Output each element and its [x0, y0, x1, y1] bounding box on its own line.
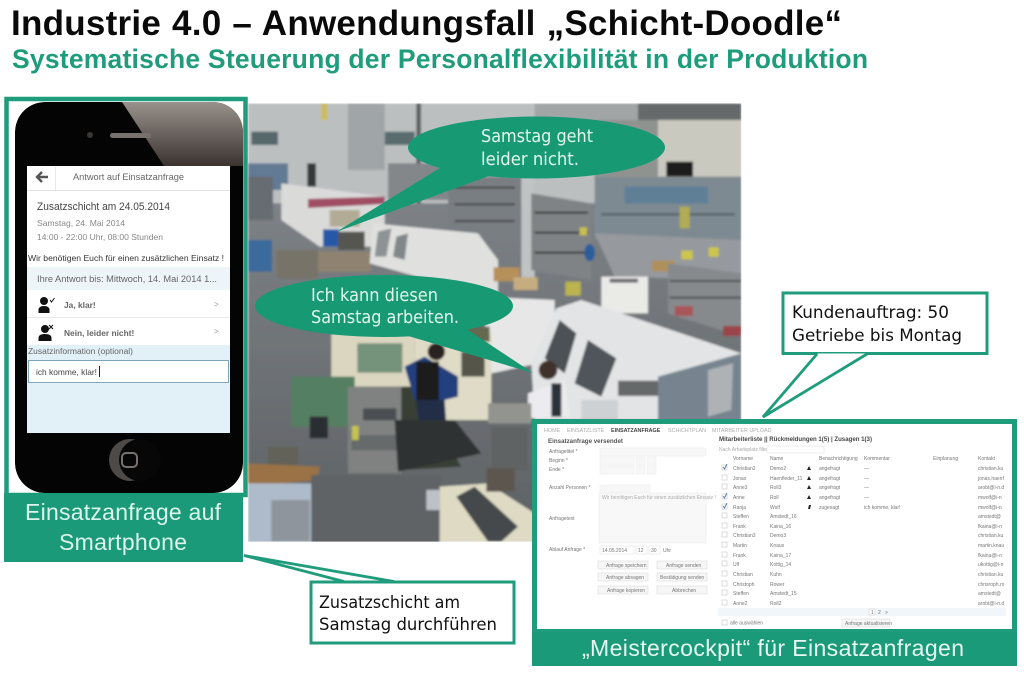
- employee table: Anne: [733, 495, 745, 501]
- phone screen: Ihre Antwort bis: Mittwoch, 14. Mai 2014 1...: [37, 274, 217, 284]
- employee table: angefragt: [819, 485, 841, 491]
- navigation tabs: HOME: [544, 428, 561, 434]
- form buttons: Abbrechen: [672, 588, 696, 594]
- speech bubble: Samstag geht leider nicht: Samstag geht: [481, 127, 593, 147]
- employee table: —: [864, 476, 869, 482]
- employee table: mwolf@i-n: [978, 495, 1002, 501]
- employee table: angefragt: [819, 476, 841, 482]
- employee table: Christian2: [733, 466, 756, 472]
- caption: Einsatzanfrage auf Smartphone: [4, 493, 243, 562]
- person status icons: [807, 466, 811, 509]
- form buttons: Anfrage senden: [666, 563, 702, 569]
- phone screen: [27, 166, 230, 433]
- employee table: Roll3: [770, 485, 782, 491]
- employee table: angefragt: [819, 466, 841, 472]
- request form: 14.05.2014: [602, 548, 627, 554]
- callout: Zusatzschicht am Samstag durchführen: Samstag durchführen: [319, 615, 497, 634]
- photo: factory floor: [248, 103, 741, 543]
- form buttons: Anfrage kopieren: [607, 588, 645, 594]
- employee table: Kuhn: [770, 572, 782, 578]
- title: Industrie 4.0 – Anwendungsfall „Schicht-Doodle“: [11, 4, 842, 43]
- employee table: 1: [871, 610, 874, 616]
- phone screen: 14:00 - 22:00 Uhr, 08:00 Stunden: [37, 233, 163, 242]
- request form: [548, 438, 716, 554]
- employee table: zugesagt: [819, 505, 840, 511]
- employee table: christian.ku: [978, 572, 1004, 578]
- employee table: Kaina_17: [770, 553, 791, 559]
- employee table: angefragt: [819, 495, 841, 501]
- speech bubble: Samstag geht leider nicht: leider nicht.: [481, 150, 579, 170]
- employee table: Ulf: [733, 562, 740, 568]
- callout: Zusatzschicht am Samstag durchführen: Zusatzschicht am: [319, 593, 460, 612]
- employee table: amstedt@: [978, 514, 1001, 520]
- employee table: Nach Arbeitsplatz filtern:: [719, 447, 773, 453]
- employee table: fkaina@i-n: [978, 524, 1002, 530]
- phone screen: Ja, klar!: [64, 300, 96, 310]
- employee table: Demo3: [770, 533, 786, 539]
- navigation tabs: EINSATZLISTE: [567, 428, 605, 434]
- employee table: Ranja: [733, 505, 746, 511]
- employee table: Einplanung: [933, 456, 958, 462]
- navigation tabs: MITARBEITER UPLOAD: [712, 428, 772, 434]
- form buttons: Anfrage absagen: [606, 575, 644, 581]
- employee table: Benachrichtigung: [819, 456, 858, 462]
- employee table: —: [864, 495, 869, 501]
- employee table: Frank: [733, 553, 746, 559]
- employee table: fkaina@i-n: [978, 553, 1002, 559]
- employee table: Kottig_14: [770, 562, 791, 568]
- navigation tabs: SCHICHTPLAN: [668, 428, 706, 434]
- panel: Meistercockpit screenshot: [532, 419, 1017, 666]
- employee table: Steffen: [733, 591, 749, 597]
- form buttons: Bestätigung senden: [660, 575, 704, 581]
- employee table: martin.knau: [978, 543, 1004, 549]
- phone screen: Antwort auf Einsatzanfrage: [73, 172, 184, 183]
- icon: person cross: [38, 325, 53, 341]
- callout: Kundenauftrag: Getriebe bis Montag: [792, 326, 962, 345]
- employee table: jonas.haenf: [977, 476, 1004, 482]
- employee table: Kaina_16: [770, 524, 791, 530]
- subtitle: Systematische Steuerung der Personalflexibilität in der Produktion: [12, 44, 868, 74]
- navigation tabs: [544, 428, 772, 434]
- request form: Ende *: [549, 467, 564, 473]
- phone screen: Wir benötigen Euch für einen zusätzlichen Einsatz !: [28, 253, 224, 263]
- callout: Zusatzschicht am Samstag durchführen: [244, 556, 514, 643]
- employee table: christian.ku: [978, 466, 1004, 472]
- employee table: Christian: [733, 572, 753, 578]
- employee table: amstedt@: [978, 591, 1001, 597]
- employee table: Anfrage aktualisieren: [845, 621, 892, 627]
- employee table: Steffen: [733, 514, 749, 520]
- request form: Anfragetitel *: [549, 449, 578, 455]
- employee table: mwolf@i-n: [978, 505, 1002, 511]
- employee table: —: [864, 466, 869, 472]
- employee table: Roll2: [770, 601, 782, 607]
- employee table: Wolf: [770, 505, 781, 511]
- phone screen: Zusatzinformation (optional): [28, 347, 133, 356]
- employee table: Anne2: [733, 601, 748, 607]
- employee table: Name: [770, 456, 784, 462]
- speech bubble: Ich kann diesen Samstag arbeiten: Samstag arbeiten.: [311, 308, 459, 328]
- phone screen: Nein, leider nicht!: [64, 328, 134, 338]
- request form: Anfragetext: [549, 516, 575, 522]
- request form: Einsatzanfrage versendet: [548, 438, 623, 445]
- employee table: arobt@i-n.d: [978, 601, 1004, 607]
- employee table: alle auswählen: [730, 620, 763, 626]
- employee table: Kontakt: [978, 456, 996, 462]
- navigation tabs: EINSATZANFRAGE: [611, 428, 661, 434]
- request form: 30: [651, 548, 657, 554]
- employee table: Roll: [770, 495, 779, 501]
- phone screen: >: [214, 300, 219, 309]
- icon: back arrow: [37, 172, 48, 182]
- panel: smartphone: [6, 99, 246, 495]
- employee table: Vorname: [733, 456, 753, 462]
- employee table: Amstedt_16: [770, 514, 797, 520]
- employee table: arobt@i-n.d: [978, 485, 1004, 491]
- request form: Anzahl Personen *: [549, 485, 590, 491]
- speech bubble: Samstag geht leider nicht: [336, 116, 665, 232]
- phone screen: Samstag, 24. Mai 2014: [37, 219, 125, 228]
- icon: phone body: [15, 102, 243, 493]
- request form: Wir benötigen Euch für einen zusätzlichen Einsatz !: [602, 495, 716, 501]
- employee table: Demo2: [770, 466, 786, 472]
- speech bubble: Ich kann diesen Samstag arbeiten: Ich kann diesen: [311, 286, 438, 306]
- employee table: Martin: [733, 543, 747, 549]
- speech bubble: Ich kann diesen Samstag arbeiten: [255, 275, 533, 373]
- employee table: >: [885, 610, 888, 616]
- select-all row: [722, 620, 727, 625]
- icon: person check: [38, 297, 54, 313]
- employee table: Jonas: [733, 476, 747, 482]
- employee table: Frank: [733, 524, 746, 530]
- employee table: christian.ku: [978, 533, 1004, 539]
- phone screen: Zusatzschicht am 24.05.2014: [37, 201, 170, 213]
- phone screen: ich komme, klar!: [36, 367, 97, 377]
- employee table: Haenfleder_11: [770, 476, 803, 482]
- employee table: [718, 436, 1006, 627]
- employee table: Knaus: [770, 543, 785, 549]
- employee table: ich komme, klar!: [864, 505, 900, 511]
- callout: Kundenauftrag: [763, 293, 987, 417]
- caption: Meistercockpit: [532, 632, 1017, 666]
- caption: Einsatzanfrage auf Smartphone: Einsatzanfrage auf: [25, 499, 222, 525]
- phone screen: >: [214, 327, 219, 336]
- employee table: Rower: [770, 582, 785, 588]
- employee table: Christian3: [733, 533, 756, 539]
- caption: Einsatzanfrage auf Smartphone: Smartphone: [59, 529, 187, 555]
- form buttons: Anfrage speichern: [606, 563, 647, 569]
- caption: Meistercockpit: „Meistercockpit“ für Einsatzanfragen: [582, 635, 964, 661]
- pagination bar: [718, 608, 1006, 616]
- employee table: Christoph: [733, 582, 755, 588]
- request form: Beginn *: [549, 458, 568, 464]
- employee table: Amstedt_15: [770, 591, 797, 597]
- employee table: chrisroph.ro: [978, 582, 1005, 588]
- employee table: Mitarbeiterliste || Rückmeldungen 1(5) | Zusagen 1(3): [719, 436, 872, 443]
- employee table: ukottig@i-n: [978, 562, 1004, 568]
- callout: Kundenauftrag: Kundenauftrag: 50: [792, 303, 949, 322]
- employee table: 2: [878, 610, 881, 616]
- employee table: Anne3: [733, 485, 748, 491]
- employee table: —: [864, 485, 869, 491]
- row checkboxes: [722, 465, 727, 605]
- request form: Ablauf Anfrage *: [549, 547, 585, 553]
- request form: 12: [638, 548, 644, 554]
- employee table: Kommentar: [864, 456, 890, 462]
- form buttons: [598, 561, 707, 594]
- request form: Uhr: [663, 548, 671, 554]
